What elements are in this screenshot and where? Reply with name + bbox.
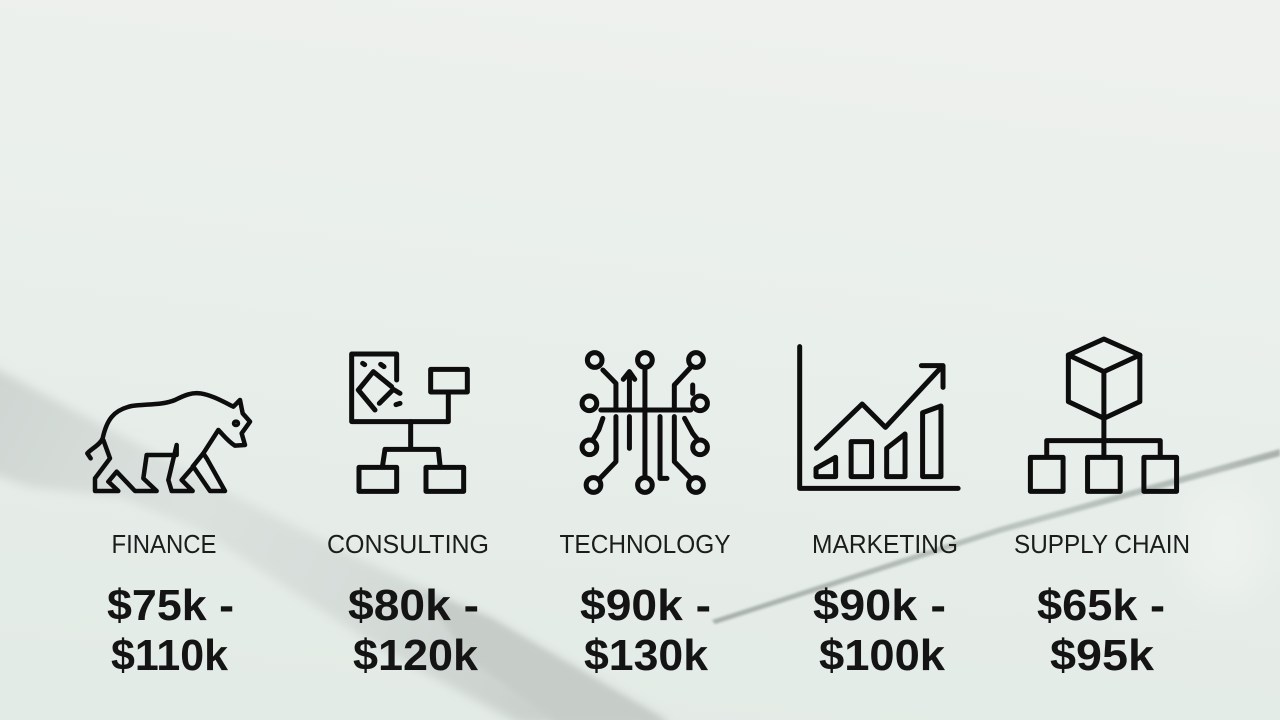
salary: consulting [348,581,479,680]
salary: finance: $110k [111,631,229,680]
salary: technology: $90k - [580,581,711,630]
label: technology: TECHNOLOGY [560,529,730,559]
icon: growth chart [800,347,958,488]
column: marketing [800,347,958,680]
salary: marketing [813,581,946,680]
icon: cube network [1030,339,1177,491]
label: finance: FINANCE [112,529,216,559]
salary: technology [580,581,711,680]
label: marketing: MARKETING [812,529,958,559]
salary: finance [107,581,234,680]
icon: bear [87,393,250,491]
salary: marketing: $100k [819,631,946,680]
salary: finance: $75k - [107,581,234,630]
salary: marketing: $90k - [813,581,946,630]
salary: supply chain: $65k - [1037,581,1165,630]
salary: consulting: $80k - [348,581,479,630]
icon: circuit [582,353,707,492]
salary: technology: $130k [584,631,709,680]
column: consulting [327,354,489,680]
icon: org chart [352,354,467,491]
salary: supply chain: $95k [1050,631,1155,680]
column: supply chain [1014,339,1190,680]
column: technology [560,353,730,680]
salary: supply chain [1037,581,1165,680]
label: consulting: CONSULTING [327,529,489,559]
label: supply chain: SUPPLY CHAIN [1014,529,1190,559]
column: finance [87,393,250,680]
salary: consulting: $120k [353,631,479,680]
